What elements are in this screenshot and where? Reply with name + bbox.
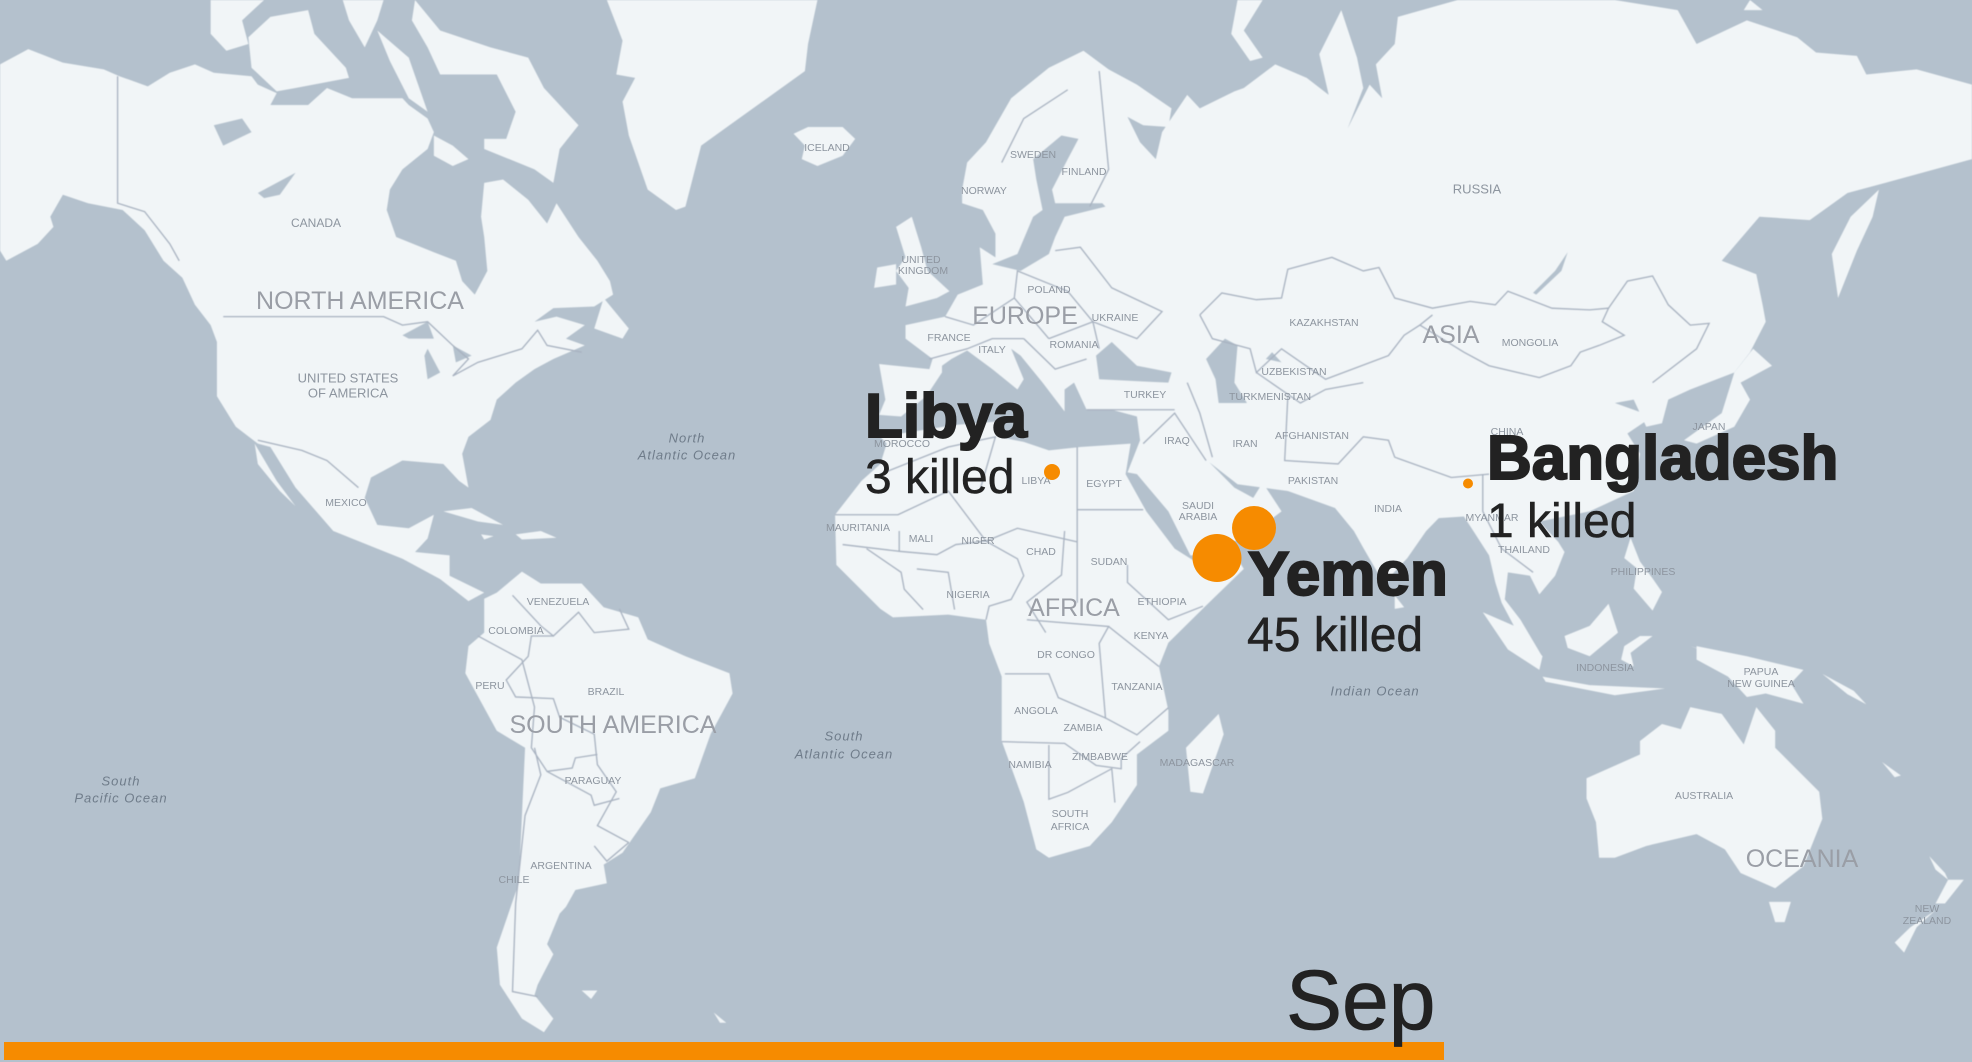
country name labels: COLOMBIA: [488, 625, 544, 637]
country name labels: [291, 142, 1952, 927]
country name labels: THAILAND: [1498, 544, 1550, 556]
land: eastern hemisphere: [835, 0, 1972, 953]
callout: Bangladesh: 1 killed: [1487, 495, 1636, 548]
country name labels: PARAGUAY: [565, 775, 621, 787]
country name labels: MAURITANIA: [826, 522, 890, 534]
country name labels: NEW: [1915, 903, 1939, 915]
country name labels: TURKMENISTAN: [1229, 391, 1311, 403]
incident markers: [1044, 464, 1473, 582]
ocean labels: Pacific Ocean: [74, 790, 168, 806]
continent labels: SOUTH AMERICA: [510, 711, 717, 739]
ocean labels: South: [825, 728, 863, 744]
country name labels: AFRICA: [1051, 821, 1089, 833]
timeline progress bar: [4, 1042, 1444, 1060]
land: western hemisphere: [0, 0, 950, 1032]
country name labels: PAKISTAN: [1288, 475, 1338, 487]
country name labels: ZEALAND: [1903, 915, 1952, 927]
country name labels: KENYA: [1134, 630, 1168, 642]
country name labels: TURKEY: [1124, 389, 1166, 401]
ocean labels: Indian Ocean: [1330, 684, 1420, 698]
country name labels: FINLAND: [1062, 166, 1107, 178]
country name labels: EGYPT: [1086, 478, 1122, 490]
country name labels: CANADA: [291, 216, 341, 230]
continent labels: EUROPE: [972, 302, 1078, 330]
continent labels: [256, 287, 1859, 873]
country name labels: MONGOLIA: [1502, 337, 1558, 349]
country name labels: ARGENTINA: [530, 860, 592, 872]
country name labels: UNITED STATES: [298, 370, 399, 386]
country name labels: MADAGASCAR: [1160, 757, 1235, 769]
ocean labels: North: [669, 430, 705, 446]
callout: Yemen: 45 killed: [1247, 609, 1423, 662]
country name labels: MYANMAR: [1466, 512, 1519, 524]
country name labels: MALI: [909, 533, 933, 545]
country name labels: RUSSIA: [1453, 182, 1502, 196]
callout: Yemen: Yemen: [1248, 540, 1448, 609]
ocean labels: [74, 430, 1420, 806]
country name labels: VENEZUELA: [527, 596, 589, 608]
country name labels: UKRAINE: [1092, 312, 1138, 324]
country name labels: OF AMERICA: [308, 386, 388, 400]
ocean labels: Atlantic Ocean: [637, 448, 736, 462]
continent labels: AFRICA: [1028, 594, 1120, 622]
country name labels: MOROCCO: [874, 438, 930, 450]
country name labels: FRANCE: [927, 332, 971, 344]
country name labels: PHILIPPINES: [1611, 566, 1675, 578]
callout: Libya: Libya: [865, 382, 1027, 451]
country name labels: BRAZIL: [588, 686, 625, 698]
country name labels: TANZANIA: [1111, 681, 1163, 693]
callout: Bangladesh: [1487, 424, 1838, 548]
country name labels: LIBYA: [1022, 475, 1050, 487]
continent labels: ASIA: [1423, 321, 1480, 349]
country name labels: INDIA: [1374, 503, 1402, 515]
country name labels: MEXICO: [325, 497, 367, 509]
country name labels: IRAQ: [1164, 435, 1190, 447]
country name labels: KINGDOM: [898, 265, 948, 277]
ocean labels: Atlantic Ocean: [794, 746, 893, 762]
country name labels: PAPUA: [1744, 666, 1778, 678]
country name labels: SAUDI: [1182, 500, 1214, 512]
country name labels: NAMIBIA: [1008, 759, 1052, 771]
callout: Libya: [865, 382, 1027, 504]
country name labels: NIGER: [961, 535, 995, 547]
country name labels: NEW GUINEA: [1727, 678, 1795, 690]
country name labels: PERU: [475, 680, 505, 692]
country name labels: ARABIA: [1179, 511, 1217, 523]
country name labels: ZAMBIA: [1063, 722, 1103, 734]
country name labels: CHILE: [499, 874, 529, 886]
country name labels: ITALY: [978, 344, 1006, 356]
country name labels: UZBEKISTAN: [1261, 366, 1327, 378]
country borders: [118, 71, 1709, 997]
country name labels: AFGHANISTAN: [1275, 430, 1349, 442]
callout: Bangladesh: Bangladesh: [1487, 424, 1838, 493]
continent labels: NORTH AMERICA: [256, 287, 464, 315]
country name labels: CHAD: [1026, 546, 1056, 558]
country name labels: UNITED: [901, 254, 941, 266]
inland and enclosed water: [214, 119, 1568, 403]
country name labels: INDONESIA: [1576, 662, 1634, 674]
country name labels: ROMANIA: [1049, 339, 1099, 351]
timeline month label: Sep: [1286, 953, 1435, 1047]
country name labels: CHINA: [1491, 426, 1523, 438]
country name labels: NIGERIA: [946, 589, 990, 601]
country name labels: SWEDEN: [1010, 149, 1056, 161]
country name labels: ETHIOPIA: [1137, 596, 1187, 608]
continent labels: OCEANIA: [1746, 845, 1859, 873]
country name labels: JAPAN: [1692, 421, 1726, 433]
country name labels: AUSTRALIA: [1675, 790, 1733, 802]
country name labels: NORWAY: [961, 185, 1007, 197]
country name labels: SOUTH: [1052, 808, 1088, 820]
country name labels: KAZAKHSTAN: [1289, 317, 1359, 329]
callout: Libya: 3 killed: [865, 451, 1014, 504]
callout: Yemen: [1247, 540, 1448, 662]
country name labels: SUDAN: [1091, 556, 1127, 568]
country name labels: ICELAND: [804, 142, 850, 154]
country name labels: DR CONGO: [1037, 649, 1095, 661]
country name labels: ANGOLA: [1014, 705, 1058, 717]
country name labels: ZIMBABWE: [1072, 751, 1128, 763]
country name labels: POLAND: [1027, 284, 1071, 296]
ocean labels: South: [102, 774, 140, 788]
country name labels: IRAN: [1232, 438, 1258, 450]
